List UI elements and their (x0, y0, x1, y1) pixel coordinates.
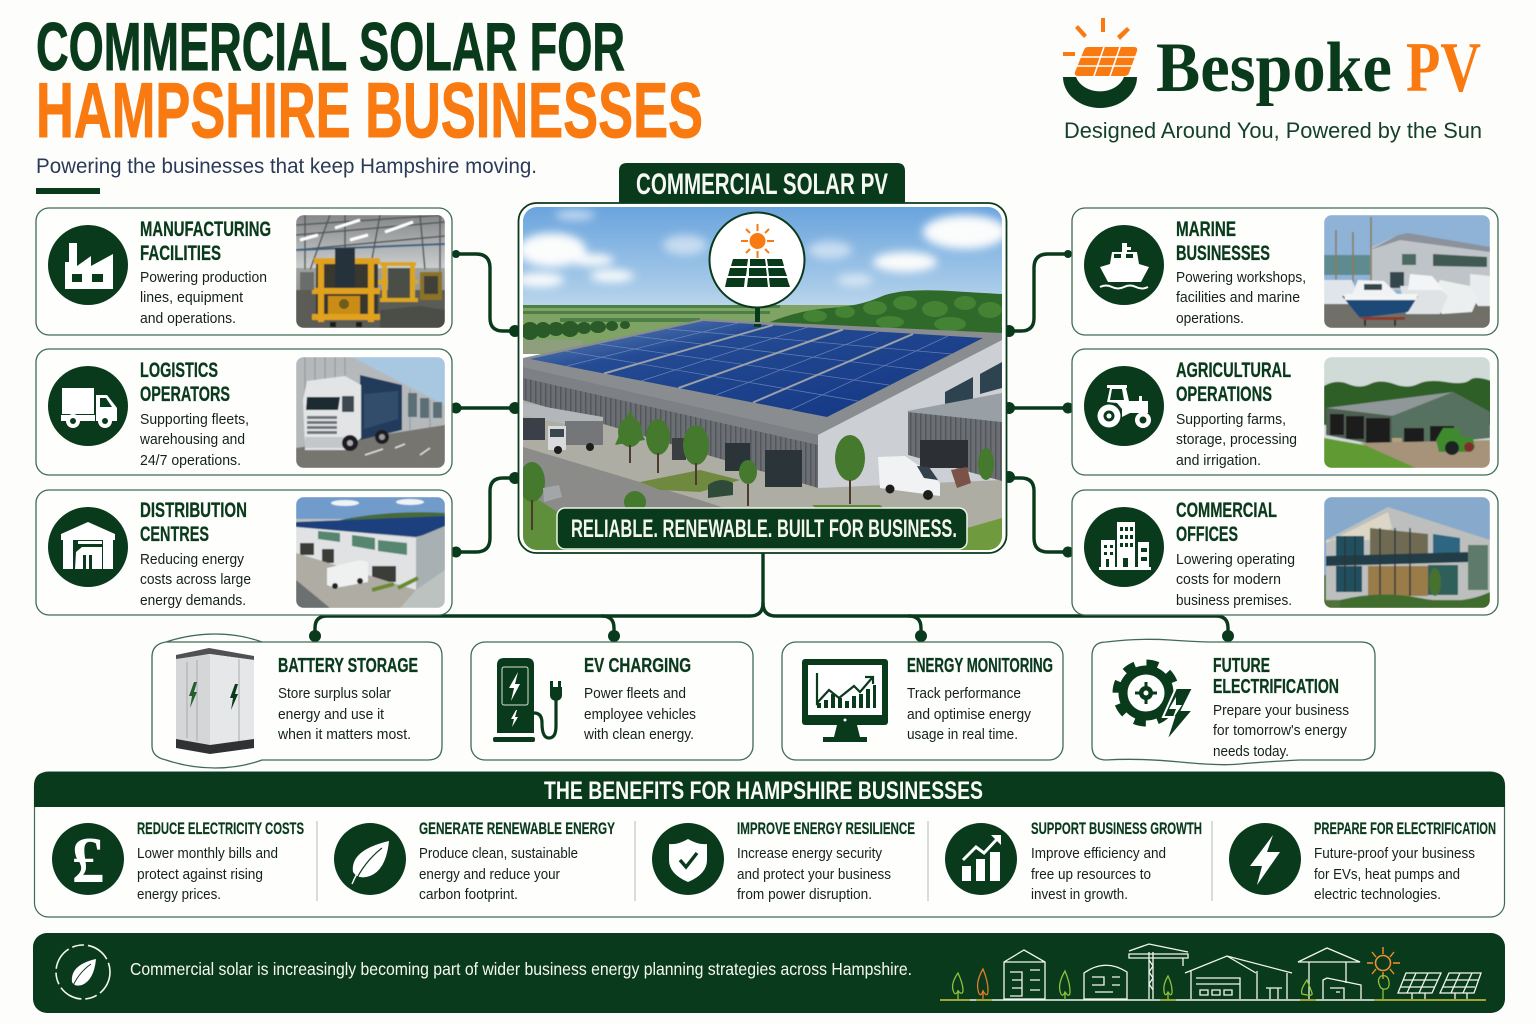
text block (140, 269, 267, 327)
panel: future electrification (1092, 639, 1375, 765)
benefit: business growth: free up resources to (1031, 866, 1151, 883)
benefit: electrification: Future-proof your business (1314, 845, 1475, 862)
text block: Store surplus solar (278, 685, 391, 702)
text block (1176, 411, 1297, 469)
text block: Powering production (140, 269, 267, 286)
logo: Bespoke PV: PV (1406, 29, 1481, 107)
text block (139, 411, 249, 469)
text block: Prepare your business (1213, 702, 1349, 719)
text block: Supporting fleets, (140, 411, 249, 428)
photo: factory floor (296, 215, 445, 328)
heading (140, 358, 230, 406)
subtitle (36, 155, 537, 194)
photo: warehouse with rooftop solar (516, 207, 1007, 550)
panel: distribution centres (36, 490, 452, 615)
annex (907, 393, 1002, 422)
photo: truck at warehouse (296, 357, 445, 468)
benefit: reduce costs: protect against rising (137, 866, 263, 883)
panel: commercial offices (1072, 490, 1498, 615)
icon: office buildings (1084, 507, 1164, 587)
heading: BATTERY STORAGE (278, 654, 418, 677)
heading: benefits (34, 772, 1505, 807)
text block: lines, equipment (140, 289, 244, 306)
text block: Commercial solar is increasingly becoming part of wider business energy planning strategies across Hampshire. (130, 959, 912, 979)
connectors: left and right cards to centre (450, 250, 1074, 558)
text block: warehousing and (139, 431, 245, 448)
text block: Lowering operating (1176, 551, 1295, 568)
logo: Bespoke PV: Designed Around You, Powered by the Sun (1064, 118, 1482, 143)
heading: MANUFACTURING (140, 217, 271, 241)
heading: OPERATORS (140, 382, 230, 406)
benefit: electrification: electric technologies. (1314, 886, 1441, 903)
text block: employee vehicles (584, 706, 696, 723)
heading: OPERATIONS (1176, 382, 1272, 406)
heading: AGRICULTURAL (1176, 358, 1291, 382)
panel: energy monitoring (782, 642, 1063, 760)
panel: agricultural operations (1072, 349, 1498, 475)
icon: shield (652, 823, 724, 895)
icon: lightning bolt (1229, 823, 1301, 895)
panel: ev charging (471, 642, 753, 760)
photo: modern office (1324, 497, 1490, 608)
heading: OFFICES (1176, 522, 1238, 546)
icon: logo sun and panel (1063, 18, 1137, 108)
icon: leaf in dashed circle (56, 945, 110, 999)
text block: storage, processing (1176, 431, 1297, 448)
title: COMMERCIAL SOLAR FOR (36, 9, 625, 85)
logo: Bespoke PV (1063, 18, 1482, 143)
benefit: renewable energy: GENERATE RENEWABLE ENERGY (419, 820, 615, 838)
text block: Track performance (907, 685, 1021, 702)
text block: and operations. (140, 310, 236, 327)
heading: benefits: THE BENEFITS FOR HAMPSHIRE BUSINESSES (544, 777, 983, 805)
text block (140, 551, 251, 609)
text block: energy and use it (278, 706, 385, 723)
text block (1176, 551, 1295, 609)
icon: gear and bolt (1116, 663, 1193, 742)
walls (523, 367, 818, 488)
icon: growth chart (945, 823, 1017, 895)
title (36, 9, 703, 154)
icon: pound (52, 823, 124, 897)
text block: with clean energy. (583, 726, 694, 743)
benefit: energy resilience: IMPROVE ENERGY RESILIENCE (737, 820, 915, 838)
panel: manufacturing facilities (36, 208, 452, 335)
icon: leaf (334, 823, 406, 895)
photo: boatyard (1324, 215, 1490, 328)
heading: COMMERCIAL (1176, 498, 1277, 522)
text block (907, 685, 1031, 743)
heading: EV CHARGING (584, 654, 691, 677)
text block: Supporting farms, (1176, 411, 1286, 428)
text block (1176, 269, 1306, 327)
heading (1176, 498, 1277, 546)
logo: Bespoke PV: Bespoke (1156, 29, 1392, 107)
photo: distribution centre (296, 497, 445, 608)
icon: monitor chart (802, 659, 888, 742)
panel: battery storage (152, 634, 442, 768)
ground (523, 395, 1002, 550)
benefit: business growth: Improve efficiency and (1031, 845, 1166, 862)
text block: and optimise energy (907, 706, 1031, 723)
benefit: electrification: for EVs, heat pumps and (1314, 866, 1460, 883)
benefit: renewable energy: carbon footprint. (419, 886, 518, 903)
benefit: energy resilience: from power disruption. (737, 886, 872, 903)
panel: centre solar photo (516, 203, 1007, 553)
benefit: business growth (945, 820, 1202, 903)
heading (140, 217, 271, 265)
heading (140, 498, 247, 546)
icon: pound: £ (72, 824, 104, 897)
benefit: reduce costs: REDUCE ELECTRICITY COSTS (137, 820, 304, 838)
text block: costs across large (140, 571, 251, 588)
benefit: reduce costs: Lower monthly bills and (137, 845, 278, 862)
heading: commercial solar pv: COMMERCIAL SOLAR PV (636, 168, 888, 201)
subtitle: Powering the businesses that keep Hampshire moving. (36, 155, 537, 178)
text block: 24/7 operations. (140, 452, 241, 469)
text block: and irrigation. (1176, 452, 1261, 469)
icon: solar pin (710, 212, 804, 327)
heading: BUSINESSES (1176, 241, 1270, 265)
icon: truck (48, 366, 128, 446)
text block: needs today. (1213, 743, 1289, 760)
text block: energy demands. (140, 592, 246, 609)
panel: footer strip (33, 933, 1505, 1013)
benefit: business growth: SUPPORT BUSINESS GROWTH (1031, 820, 1202, 838)
text block: Powering workshops, (1176, 269, 1306, 286)
benefit: energy resilience: Increase energy security (737, 845, 882, 862)
icon: warehouse (48, 507, 128, 587)
heading: ENERGY MONITORING (907, 654, 1053, 677)
heading: commercial solar pv (619, 163, 905, 203)
text block: business premises. (1176, 592, 1292, 609)
heading: FACILITIES (140, 241, 221, 265)
text block: costs for modern (1176, 571, 1281, 588)
benefit: renewable energy (334, 820, 615, 903)
benefit: reduce costs: energy prices. (137, 886, 221, 903)
text block: operations. (1176, 310, 1244, 327)
benefit: business growth: invest in growth. (1031, 886, 1128, 903)
title: HAMPSHIRE BUSINESSES (36, 66, 703, 154)
benefit: energy resilience (652, 820, 915, 903)
text block: when it matters most. (277, 726, 411, 743)
photo: farm barn (1324, 357, 1494, 468)
heading: FUTURE (1213, 654, 1270, 677)
heading: LOGISTICS (140, 358, 218, 382)
heading (1176, 358, 1291, 406)
van (878, 456, 940, 496)
roof (523, 319, 1002, 435)
callout: reliable banner (557, 508, 967, 549)
benefit: electrification (1229, 820, 1496, 903)
heading: CENTRES (140, 522, 209, 546)
loading bay and trucks (523, 403, 603, 424)
illustration: skyline (940, 944, 1486, 1000)
heading (1176, 217, 1270, 265)
heading: ELECTRIFICATION (1213, 675, 1339, 698)
heading: MARINE (1176, 217, 1236, 241)
benefit: renewable energy: Produce clean, sustainable (419, 845, 578, 862)
callout: reliable banner: RELIABLE. RENEWABLE. BUILT FOR BUSINESS. (571, 515, 957, 543)
heading (1213, 654, 1339, 698)
heading: DISTRIBUTION (140, 498, 247, 522)
text block: Power fleets and (584, 685, 686, 702)
icon: tractor (1084, 366, 1164, 446)
panel: logistics operators (36, 349, 452, 475)
connector: centre to solution cards (309, 553, 1234, 642)
text block: for tomorrow's energy (1213, 722, 1347, 739)
panel: marine businesses (1072, 208, 1498, 335)
icon: factory (48, 225, 128, 305)
doors (725, 443, 802, 487)
benefit: reduce costs (52, 820, 304, 903)
benefit: renewable energy: energy and reduce your (419, 866, 560, 883)
icon: boat (1084, 225, 1164, 305)
text block: usage in real time. (907, 726, 1018, 743)
icon: ev charger (493, 658, 562, 742)
benefit: energy resilience: and protect your business (737, 866, 891, 883)
icon: battery cabinet (176, 648, 254, 754)
trees (519, 410, 994, 513)
text block (1213, 702, 1349, 760)
text block (583, 685, 696, 743)
text block: facilities and marine (1176, 289, 1300, 306)
panel: benefits (34, 772, 1505, 917)
text block: Reducing energy (140, 551, 244, 568)
text block (277, 685, 411, 743)
